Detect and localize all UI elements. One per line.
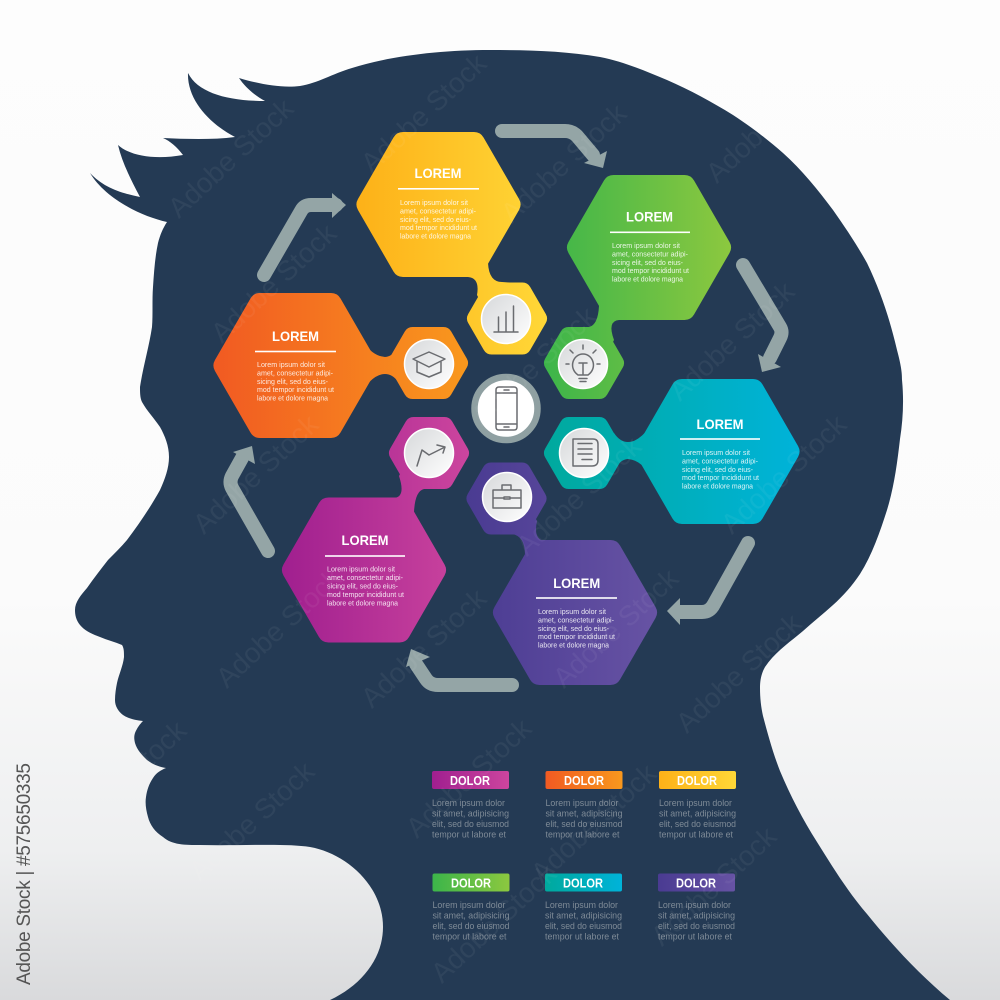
legend: orange: elit, sed do eiusmod <box>546 819 622 829</box>
legend: magenta <box>432 771 509 840</box>
text block: mod tempor incididunt ut <box>327 590 405 599</box>
panel: purple hexagon <box>476 472 646 674</box>
text block <box>398 188 479 241</box>
legend: orange: tempor ut labore et <box>546 830 620 840</box>
legend: yellow: tempor ut labore et <box>659 830 733 840</box>
icon: briefcase <box>482 472 532 522</box>
legend: yellow <box>659 771 736 840</box>
text block: amet, consectetur adipi- <box>257 368 333 377</box>
text block: mod tempor incididunt ut <box>257 385 335 394</box>
text block: sicing elit, sed do eius- <box>400 215 471 224</box>
text block: amet, consectetur adipi- <box>327 573 403 582</box>
legend: green: elit, sed do eiusmod <box>432 921 510 931</box>
legend: teal: sit amet, adipisicing <box>545 910 622 920</box>
legend: purple: DOLOR <box>676 876 716 890</box>
text block <box>610 232 690 284</box>
text block: mod tempor incididunt ut <box>612 266 690 275</box>
arrow: yellow to green <box>502 131 607 168</box>
text block: sicing elit, sed do eius- <box>327 582 398 590</box>
text block: labore et dolore magna <box>612 275 684 284</box>
heading: LOREM <box>272 328 319 344</box>
watermark pattern: Adobe Stock <box>547 562 685 694</box>
text block: sicing elit, sed do eius- <box>682 465 753 474</box>
panel: magenta hexagon <box>293 426 460 632</box>
legend: purple: tempor ut labore et <box>658 932 732 942</box>
watermark pattern: Adobe Stock <box>700 57 838 189</box>
arrow: teal to purple <box>667 543 748 625</box>
watermark pattern: Adobe Stock <box>210 562 348 694</box>
text block: amet, consectetur adipi- <box>612 249 688 258</box>
watermark pattern: Adobe Stock <box>355 47 493 179</box>
icon: central phone <box>474 377 538 440</box>
legend: green: tempor ut labore et <box>432 932 507 942</box>
text block: labore et dolore magna <box>327 598 399 607</box>
legend: teal: tempor ut labore et <box>545 932 619 942</box>
text block: amet, consectetur adipi- <box>538 615 614 624</box>
legend: orange: sit amet, adipisicing <box>546 808 622 818</box>
panel: teal hexagon <box>553 390 788 513</box>
legend: purple: sit amet, adipisicing <box>658 910 735 920</box>
text block <box>536 597 617 650</box>
text block: Lorem ipsum dolor sit <box>257 360 326 369</box>
watermark pattern: Adobe Stock <box>645 820 783 952</box>
watermark pattern: Adobe Stock <box>425 857 563 989</box>
legend: green: sit amet, adipisicing <box>432 910 510 920</box>
text block: Lorem ipsum dolor sit <box>612 241 681 250</box>
watermark pattern: Adobe Stock <box>55 714 193 846</box>
text block <box>255 351 336 403</box>
legend: yellow: Lorem ipsum dolor <box>659 798 732 808</box>
text block: mod tempor incididunt ut <box>682 473 760 482</box>
heading: LOREM <box>553 575 600 591</box>
stock id label: Adobe Stock | #575650335 <box>14 763 35 985</box>
watermark pattern: Adobe Stock <box>525 757 663 889</box>
legend: yellow: DOLOR <box>677 774 717 788</box>
arrow: purple to magenta <box>406 649 512 685</box>
panel: green hexagon <box>553 186 720 390</box>
text block: Lorem ipsum dolor sit <box>327 565 396 574</box>
watermark pattern: Adobe Stock <box>495 97 633 229</box>
panel: orange hexagon <box>224 304 459 427</box>
legend: green: Lorem ipsum dolor <box>432 900 506 910</box>
legend: orange: Lorem ipsum dolor <box>546 798 618 808</box>
watermark pattern: Adobe Stock <box>715 408 853 540</box>
icon: document <box>560 428 608 478</box>
legend: yellow: elit, sed do eiusmod <box>659 819 736 829</box>
legend: magenta: DOLOR <box>450 774 490 788</box>
legend: orange <box>546 771 622 840</box>
text block: amet, consectetur adipi- <box>682 456 758 465</box>
legend: yellow: sit amet, adipisicing <box>659 808 736 818</box>
legend: magenta: tempor ut labore et <box>432 830 506 840</box>
legend: purple: elit, sed do eiusmod <box>658 921 735 931</box>
watermark pattern: Adobe Stock <box>663 275 801 407</box>
text block: Lorem ipsum dolor sit <box>400 198 469 207</box>
text block: sicing elit, sed do eius- <box>612 258 683 267</box>
legend: teal <box>545 874 622 942</box>
legend: purple <box>658 874 735 942</box>
icon: graduation cap <box>404 340 454 388</box>
watermark pattern: Adobe Stock <box>400 712 538 844</box>
text block: amet, consectetur adipi- <box>400 206 476 215</box>
watermark pattern: Adobe Stock <box>183 755 321 887</box>
text block: Lorem ipsum dolor sit <box>682 448 751 457</box>
text block: labore et dolore magna <box>682 482 754 491</box>
arrow: orange to yellow <box>264 193 346 275</box>
watermark pattern: Adobe Stock <box>187 408 325 540</box>
text block: sicing elit, sed do eius- <box>257 377 328 386</box>
icon: light bulb <box>558 340 608 388</box>
legend: orange: DOLOR <box>564 774 604 788</box>
watermark pattern: Adobe Stock <box>670 607 808 739</box>
heading: LOREM <box>414 165 462 181</box>
text block: labore et dolore magna <box>400 232 472 241</box>
icon: trend arrow <box>404 428 454 478</box>
heading: LOREM <box>342 532 388 548</box>
legend: teal: elit, sed do eiusmod <box>545 921 622 931</box>
heading: LOREM <box>696 416 744 432</box>
watermark pattern <box>55 47 853 989</box>
text block: labore et dolore magna <box>538 641 610 650</box>
watermark pattern: Adobe Stock <box>355 582 493 714</box>
legend: teal: Lorem ipsum dolor <box>545 900 618 910</box>
legend: green <box>432 874 510 942</box>
watermark pattern: Adobe Stock <box>205 217 343 349</box>
legend: purple: Lorem ipsum dolor <box>658 900 731 910</box>
legend: magenta: sit amet, adipisicing <box>432 808 509 818</box>
watermark pattern: Adobe Stock <box>162 92 300 224</box>
legend: green: DOLOR <box>451 876 491 890</box>
text block <box>680 438 760 491</box>
legend: magenta: elit, sed do eiusmod <box>432 819 509 829</box>
watermark pattern: Adobe Stock <box>510 430 648 562</box>
heading: LOREM <box>626 208 673 224</box>
arrow: green to teal <box>743 265 782 372</box>
text block: labore et dolore magna <box>257 394 329 403</box>
text block: Lorem ipsum dolor sit <box>538 607 607 616</box>
text block: mod tempor incididunt ut <box>400 223 478 232</box>
legend: magenta: Lorem ipsum dolor <box>432 798 505 808</box>
text block: mod tempor incididunt ut <box>538 632 616 641</box>
watermark pattern: Adobe Stock <box>465 300 603 432</box>
arrow: magenta to orange <box>230 446 268 551</box>
legend: teal: DOLOR <box>563 876 603 890</box>
text block: sicing elit, sed do eius- <box>538 624 609 633</box>
text block <box>325 555 405 607</box>
icon: bar chart <box>482 294 530 344</box>
panel: yellow hexagon <box>368 143 538 346</box>
